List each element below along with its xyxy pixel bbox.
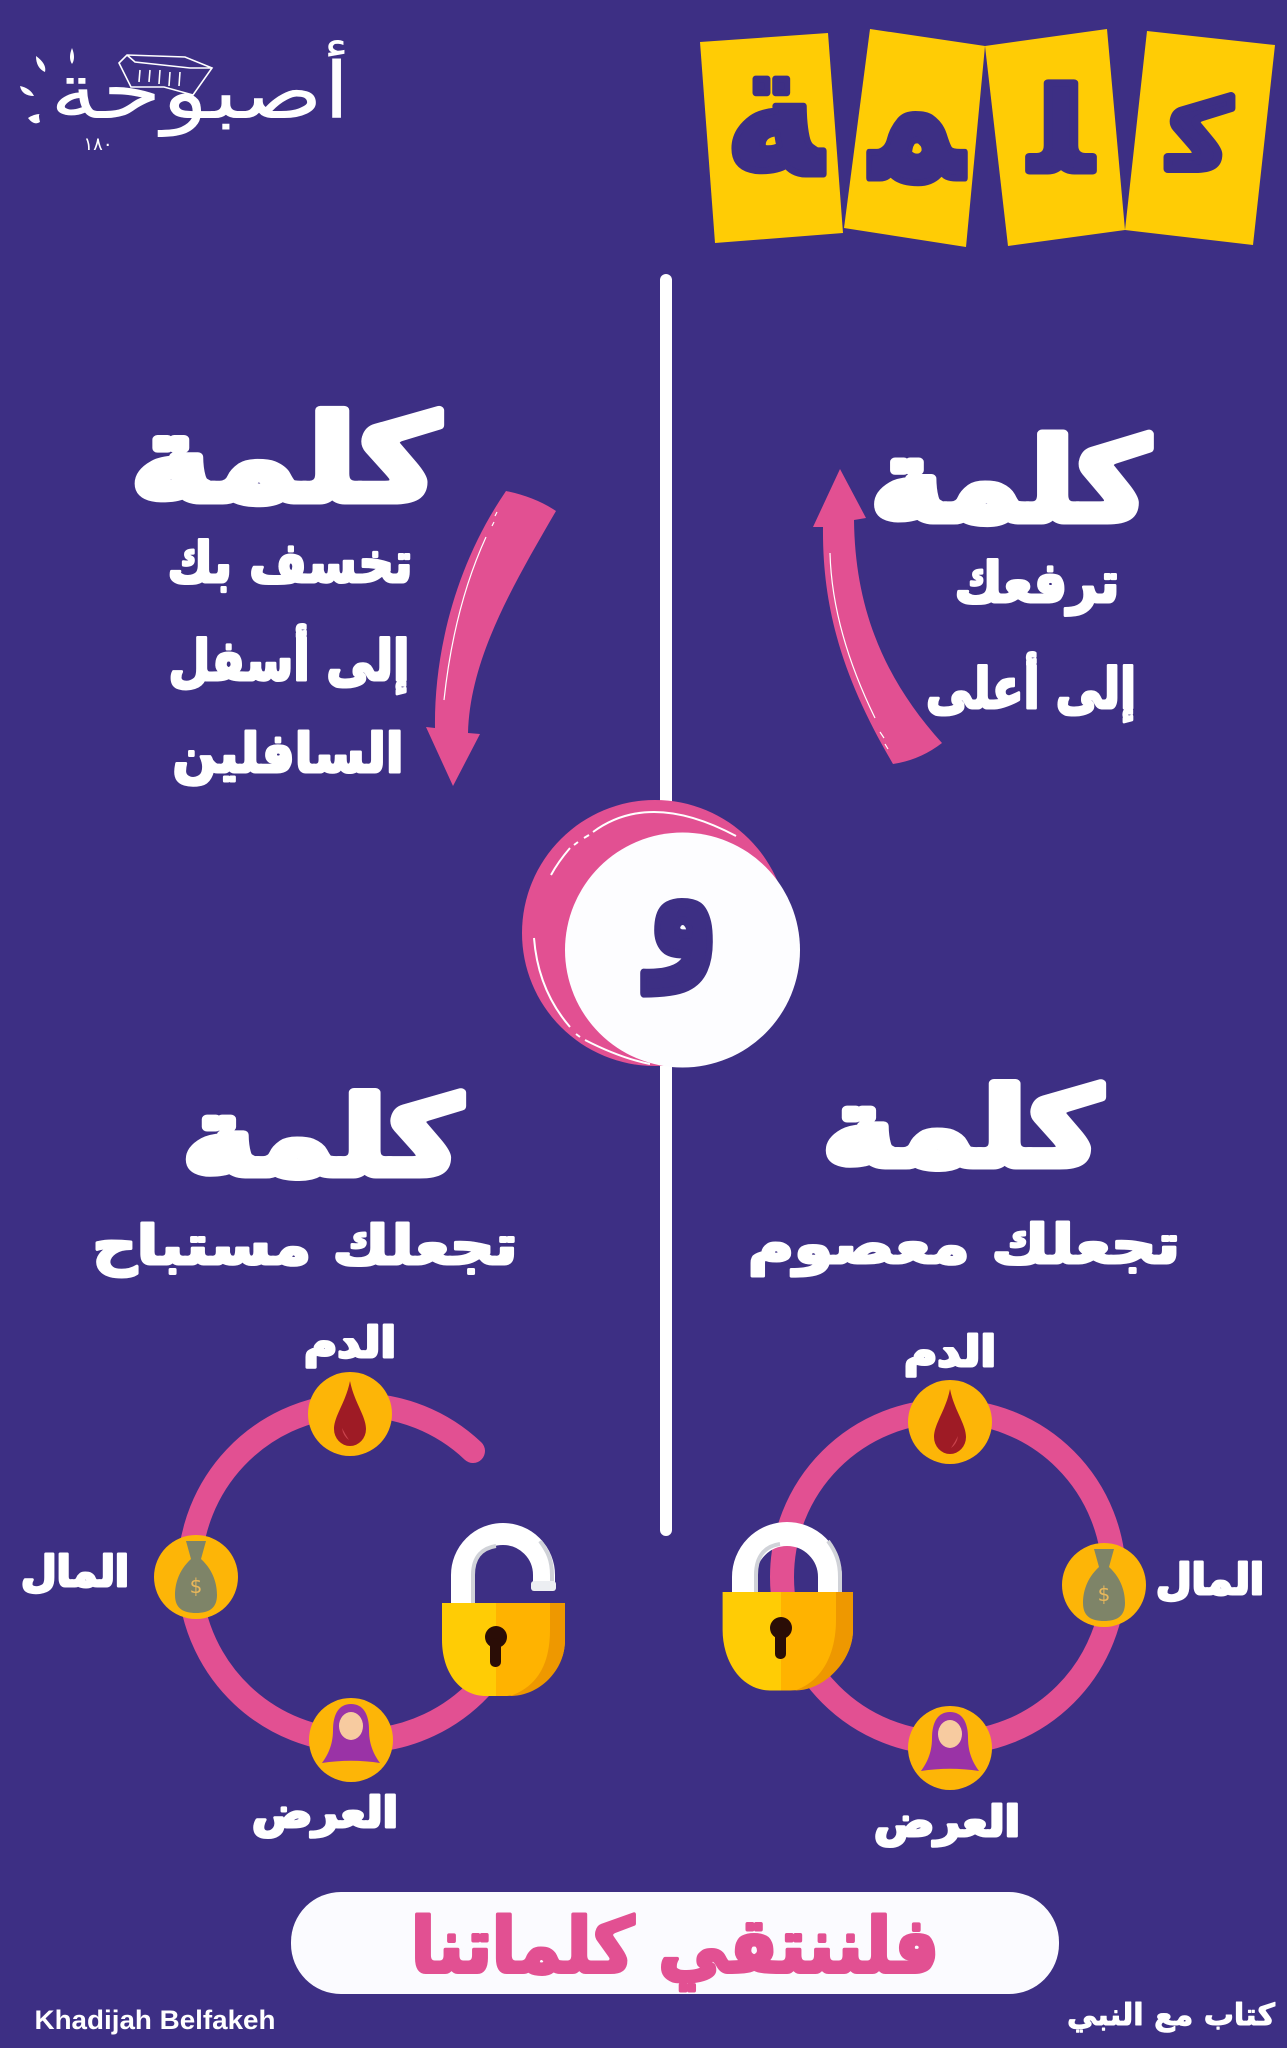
icon: blood drop (308, 1372, 392, 1456)
chart: right closed ring (723, 1380, 1146, 1790)
center badge: waw: و (643, 805, 718, 993)
icon: blood drop (908, 1380, 992, 1464)
title: folded paper banner: ك‍ (1168, 80, 1231, 192)
icon: veiled woman (908, 1706, 992, 1790)
label: honor, left: العرض (252, 1788, 398, 1838)
icon: veiled woman (309, 1698, 393, 1782)
text: to the top: إلى أعلى (926, 652, 1136, 722)
text: of the lowest: السافلين (172, 722, 404, 785)
icon: open padlock (442, 1534, 565, 1696)
text: makes you protected: تجعلك معصوم (748, 1213, 1180, 1276)
label: honor, right: العرض (874, 1797, 1020, 1847)
icon: money bag (1062, 1543, 1146, 1627)
logo: Osbooha 180 (20, 40, 350, 155)
title: folded paper banner (700, 0, 1275, 247)
footer: author: Khadijah Belfakeh (34, 2005, 276, 2035)
label: blood, right: الدم (904, 1327, 996, 1377)
footer: source: كتاب مع النبي (1067, 1998, 1276, 2033)
chart: left open ring (154, 1372, 565, 1782)
logo: Osbooha 180: أصبوحة (50, 40, 350, 138)
arrow: pink downward (426, 491, 556, 786)
label: blood, left: الدم (304, 1318, 396, 1368)
callout: choose our words (291, 1892, 1059, 1994)
title: folded paper banner: ‍ل‍ (1028, 64, 1093, 199)
label: wealth, right: المال (1156, 1555, 1264, 1604)
icon: closed padlock (723, 1534, 853, 1690)
heading: word: كلمة (823, 1067, 1102, 1191)
text: makes you violable: تجعلك مستباح (92, 1214, 518, 1277)
center badge: waw (522, 800, 800, 1068)
logo: Osbooha 180: ١٨٠ (83, 134, 113, 155)
heading: word: كلمة (183, 1076, 462, 1200)
heading: word: كلمة (131, 390, 439, 528)
text: raises you: ترفعك (954, 551, 1120, 616)
callout: choose our words: فلننتقي كلماتنا (411, 1901, 939, 1991)
text: lowers you: تخسف بك (168, 531, 412, 596)
text: to the bottom: إلى أسفل (168, 624, 410, 694)
title: folded paper banner: ‍ة (724, 2, 824, 218)
icon: money bag (154, 1535, 238, 1619)
icon: money bag: $ (190, 1574, 202, 1598)
label: wealth, left: المال (21, 1547, 129, 1596)
heading: word: كلمة (871, 415, 1149, 547)
arrow: pink upward (813, 469, 942, 764)
center vertical divider (660, 280, 672, 1530)
icon: money bag: $ (1098, 1582, 1110, 1606)
